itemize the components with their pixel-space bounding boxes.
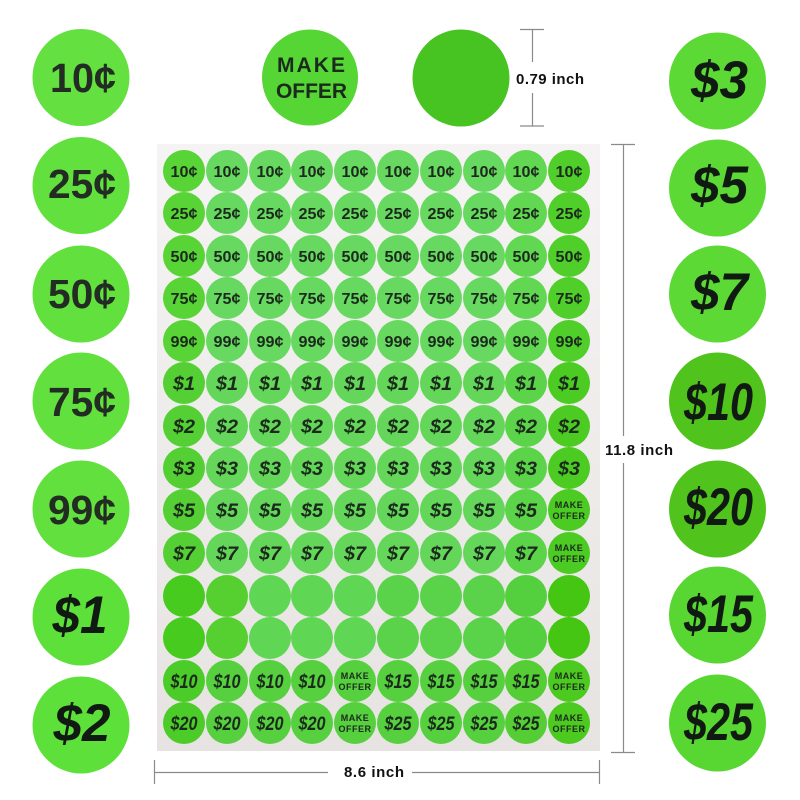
row: $10 and $15 xyxy=(163,660,590,702)
row: 75¢: 75¢ xyxy=(556,291,583,308)
row: $3 xyxy=(163,447,590,489)
row: 25¢: 25¢ xyxy=(384,206,412,223)
row: $10 and $15: $15 xyxy=(470,671,498,693)
row: 99¢: 99¢ xyxy=(214,334,241,351)
row: $2: $2 xyxy=(215,416,238,438)
row: $2: $2 xyxy=(300,416,323,438)
dimension: sticker diameter 0.79 inch xyxy=(516,30,584,126)
row: 10¢: 10¢ xyxy=(256,164,284,181)
row: $5: $5 xyxy=(386,500,410,522)
row: $20 and $25: $20 xyxy=(170,713,198,735)
row: $7: $7 xyxy=(386,543,410,565)
row: $1: $1 xyxy=(429,373,452,395)
row: $5: $5 xyxy=(514,500,538,522)
row: $7: $7 xyxy=(300,543,324,565)
row: $5: $5 xyxy=(300,500,324,522)
left column of large price stickers: 99¢ xyxy=(48,487,116,533)
left column of large price stickers: 75¢ xyxy=(48,379,116,425)
right column of large price stickers: $20 xyxy=(683,478,753,537)
row: 25¢: 25¢ xyxy=(556,206,583,223)
row: 75¢: 75¢ xyxy=(256,291,284,308)
left column of large price stickers xyxy=(32,29,130,774)
left column of large price stickers: 10¢ xyxy=(50,55,116,101)
row: 10¢: 10¢ xyxy=(512,164,540,181)
row: $5: MAKE xyxy=(555,500,583,510)
row: $1: $1 xyxy=(300,373,323,395)
row: $2: $2 xyxy=(258,416,281,438)
row: 10¢: 10¢ xyxy=(428,164,455,181)
row: 75¢: 75¢ xyxy=(342,291,369,308)
row: $7: $7 xyxy=(172,543,196,565)
row: 50¢: 50¢ xyxy=(342,249,369,266)
row: $2: $2 xyxy=(557,416,580,438)
row: $7: MAKE xyxy=(555,543,583,553)
row: 99¢: 99¢ xyxy=(470,334,498,351)
row: $7: $7 xyxy=(472,543,496,565)
row: $1: $1 xyxy=(343,373,366,395)
row: $20 and $25: $25 xyxy=(512,713,540,735)
row: $7: $7 xyxy=(514,543,538,565)
dimension: sheet height 11.8 inch: 11.8 inch xyxy=(605,442,673,459)
row: $1: $1 xyxy=(472,373,495,395)
row: 25¢: 25¢ xyxy=(428,206,455,223)
row: $20 and $25: MAKE xyxy=(555,713,583,723)
row: 25¢: 25¢ xyxy=(170,206,198,223)
row: $1 xyxy=(163,362,590,404)
row: $20 and $25: OFFER xyxy=(338,724,372,734)
row: 10¢: 10¢ xyxy=(298,164,326,181)
row: $5: $5 xyxy=(215,500,239,522)
row: 50¢: 50¢ xyxy=(214,249,241,266)
row: 99¢: 99¢ xyxy=(384,334,412,351)
row: $2: $2 xyxy=(472,416,495,438)
row: $20 and $25: $25 xyxy=(427,713,455,735)
row: $3: $3 xyxy=(429,458,452,480)
row: $7: $7 xyxy=(343,543,367,565)
row: 10¢: 10¢ xyxy=(470,164,498,181)
row: $3: $3 xyxy=(514,458,537,480)
row: 25¢: 25¢ xyxy=(512,206,540,223)
row: $20 and $25: $20 xyxy=(213,713,241,735)
row: $7: $7 xyxy=(429,543,453,565)
row: 75¢: 75¢ xyxy=(298,291,326,308)
row: $1: $1 xyxy=(172,373,195,395)
row: 75¢: 75¢ xyxy=(512,291,540,308)
row: $10 and $15: $10 xyxy=(256,671,284,693)
row: $7 xyxy=(163,532,590,574)
row: blank stickers xyxy=(163,575,590,617)
row: $3: $3 xyxy=(557,458,580,480)
row: $2: $2 xyxy=(429,416,452,438)
row: $2: $2 xyxy=(172,416,195,438)
row: $3: $3 xyxy=(172,458,195,480)
row: $3: $3 xyxy=(386,458,409,480)
row: $3: $3 xyxy=(300,458,323,480)
right column of large price stickers: $7 xyxy=(690,263,750,322)
row: $3: $3 xyxy=(343,458,366,480)
row: $10 and $15: $10 xyxy=(298,671,326,693)
row: 50¢: 50¢ xyxy=(470,249,498,266)
row: 99¢: 99¢ xyxy=(428,334,455,351)
row: 25¢: 25¢ xyxy=(470,206,498,223)
row: 75¢ xyxy=(163,277,590,319)
row: $5: $5 xyxy=(343,500,367,522)
row: 99¢: 99¢ xyxy=(170,334,198,351)
row: $20 and $25 xyxy=(163,702,590,744)
row: 50¢: 50¢ xyxy=(428,249,455,266)
row: $5: OFFER xyxy=(552,511,586,521)
row: 50¢ xyxy=(163,235,590,277)
row: $10 and $15: OFFER xyxy=(552,682,586,692)
row: 99¢: 99¢ xyxy=(512,334,540,351)
row: $20 and $25: MAKE xyxy=(341,713,369,723)
row: $20 and $25: $25 xyxy=(470,713,498,735)
row: 99¢: 99¢ xyxy=(342,334,369,351)
top make offer sticker: MAKE xyxy=(277,54,345,77)
left column of large price stickers: $1 xyxy=(52,586,108,645)
sticker sheet xyxy=(157,144,600,751)
row: 75¢: 75¢ xyxy=(428,291,455,308)
dimension: sheet height 11.8 inch xyxy=(605,144,673,752)
row: 50¢: 50¢ xyxy=(170,249,198,266)
dimension: sticker diameter 0.79 inch: 0.79 inch xyxy=(516,71,584,88)
row: 50¢: 50¢ xyxy=(298,249,326,266)
row: $3: $3 xyxy=(472,458,495,480)
row: $10 and $15: $10 xyxy=(170,671,198,693)
row: 25¢: 25¢ xyxy=(298,206,326,223)
row: $3: $3 xyxy=(258,458,281,480)
row: 10¢: 10¢ xyxy=(384,164,412,181)
row: 10¢: 10¢ xyxy=(170,164,198,181)
row: $1: $1 xyxy=(514,373,537,395)
row: $5 xyxy=(163,489,590,531)
dimension: sheet width 8.6 inch xyxy=(154,760,600,784)
row: $2 xyxy=(163,405,590,447)
row: $5: $5 xyxy=(429,500,453,522)
row: $2: $2 xyxy=(386,416,409,438)
row: $5: $5 xyxy=(258,500,282,522)
row: $20 and $25: $25 xyxy=(384,713,412,735)
row: 25¢: 25¢ xyxy=(342,206,369,223)
row: $20 and $25: $20 xyxy=(256,713,284,735)
right column of large price stickers: $10 xyxy=(683,373,753,432)
row: $5: $5 xyxy=(172,500,196,522)
row: $1: $1 xyxy=(258,373,281,395)
row: $10 and $15: $15 xyxy=(384,671,412,693)
row: 50¢: 50¢ xyxy=(512,249,540,266)
row: $7: $7 xyxy=(258,543,282,565)
row: $1: $1 xyxy=(386,373,409,395)
sheet background xyxy=(157,144,600,751)
row: $7: $7 xyxy=(215,543,239,565)
row: 99¢: 99¢ xyxy=(256,334,284,351)
row: $1: $1 xyxy=(557,373,580,395)
row: 99¢: 99¢ xyxy=(556,334,583,351)
left column of large price stickers: 50¢ xyxy=(48,271,116,317)
row: 10¢: 10¢ xyxy=(214,164,241,181)
row: 75¢: 75¢ xyxy=(170,291,198,308)
right column of large price stickers: $15 xyxy=(683,585,754,644)
right column of large price stickers xyxy=(669,32,766,772)
row: $2: $2 xyxy=(343,416,366,438)
row: 99¢: 99¢ xyxy=(298,334,326,351)
row: $10 and $15: $15 xyxy=(512,671,540,693)
row: $10 and $15: MAKE xyxy=(341,671,369,681)
row: 75¢: 75¢ xyxy=(214,291,241,308)
row: $2: $2 xyxy=(514,416,537,438)
right column of large price stickers: $5 xyxy=(690,156,749,215)
row: $3: $3 xyxy=(215,458,238,480)
row: $5: $5 xyxy=(472,500,496,522)
top make offer sticker xyxy=(262,30,358,126)
row: 50¢: 50¢ xyxy=(256,249,284,266)
row: 10¢: 10¢ xyxy=(342,164,369,181)
left column of large price stickers: $2 xyxy=(53,694,110,753)
row: $10 and $15: OFFER xyxy=(338,682,372,692)
right column of large price stickers: $3 xyxy=(690,51,748,110)
row: 10¢ xyxy=(163,150,590,192)
row: $10 and $15: MAKE xyxy=(555,671,583,681)
row: 25¢ xyxy=(163,192,590,234)
row: blank stickers xyxy=(163,617,590,659)
row: $20 and $25: OFFER xyxy=(552,724,586,734)
row: $10 and $15: $10 xyxy=(213,671,241,693)
row: $7: OFFER xyxy=(552,554,586,564)
row: 75¢: 75¢ xyxy=(384,291,412,308)
row: 99¢ xyxy=(163,320,590,362)
row: 10¢: 10¢ xyxy=(556,164,583,181)
row: $20 and $25: $20 xyxy=(298,713,326,735)
row: $10 and $15: $15 xyxy=(427,671,455,693)
row: 25¢: 25¢ xyxy=(214,206,241,223)
left column of large price stickers: 25¢ xyxy=(48,161,116,207)
row: $1: $1 xyxy=(215,373,238,395)
row: 50¢: 50¢ xyxy=(556,249,583,266)
top make offer sticker: OFFER xyxy=(276,80,347,103)
row: 50¢: 50¢ xyxy=(384,249,412,266)
blank sticker xyxy=(412,30,510,126)
dimension: sheet width 8.6 inch: 8.6 inch xyxy=(344,764,404,781)
row: 25¢: 25¢ xyxy=(256,206,284,223)
row: 75¢: 75¢ xyxy=(470,291,498,308)
right column of large price stickers: $25 xyxy=(683,693,754,752)
